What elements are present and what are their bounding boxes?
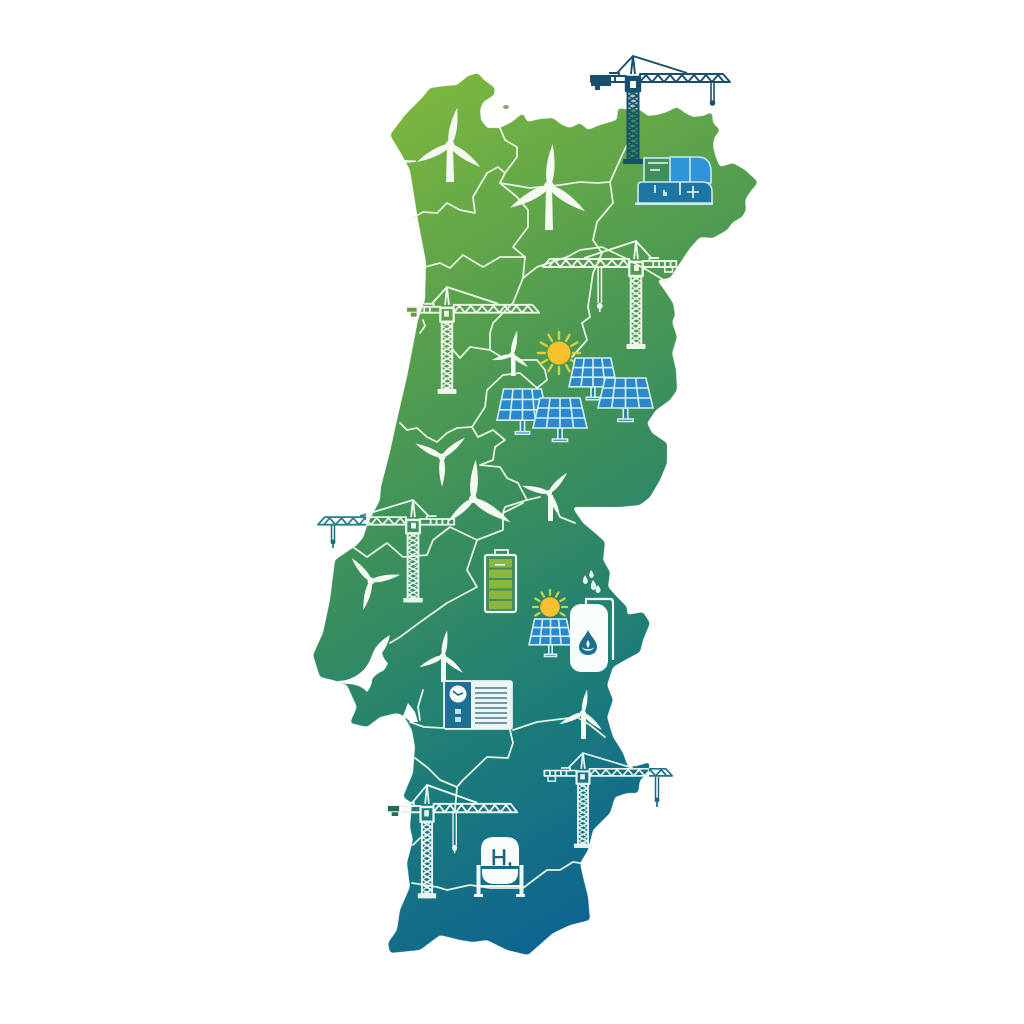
building: left upper block (644, 158, 672, 183)
solar panel: B (533, 398, 587, 442)
hydrogen tank: bowl (482, 869, 518, 884)
sun: south (533, 590, 567, 617)
Tagus estuary (337, 635, 390, 692)
crane: south-east white with teal jib end (544, 753, 672, 847)
crane: south-west white (388, 785, 517, 897)
solar panel: C (569, 358, 617, 400)
turbine: beside sun (491, 330, 529, 376)
data panel: clock (450, 686, 466, 702)
wind turbines (349, 107, 603, 739)
data panel icon (444, 681, 512, 729)
building: base line (635, 202, 713, 205)
hydrogen tank: legs (474, 865, 525, 897)
map of Portugal (313, 73, 758, 955)
solar panel: D (598, 378, 653, 422)
tank: body (570, 604, 608, 672)
turbine: west coast (349, 556, 401, 611)
Sado estuary (403, 703, 418, 722)
small island (503, 105, 509, 109)
regional borders (353, 128, 667, 890)
turbine: north-centre (508, 144, 588, 230)
hydrogen tank: label: H, (491, 845, 513, 870)
data panel: frame (444, 681, 512, 729)
building: marks (648, 163, 699, 198)
battery: cells (489, 559, 512, 609)
battery: cap (495, 550, 508, 555)
tank: pipe (586, 599, 613, 660)
tank: water drop (579, 630, 597, 655)
storage building icon (635, 157, 713, 205)
turbine: centre-east (521, 471, 569, 521)
turbine: centre (446, 460, 513, 526)
crane: north-coast white (407, 287, 539, 393)
crane: north-east navy (591, 56, 730, 163)
map silhouette (313, 73, 758, 955)
building: dome (670, 157, 711, 183)
crane jib over white background (649, 768, 674, 777)
water tank icon (570, 570, 613, 672)
battery icon (485, 550, 516, 612)
solar panel: south (529, 619, 572, 656)
crane hook (654, 777, 660, 807)
battery: body (485, 555, 516, 612)
data panel: blue side (445, 682, 471, 728)
hydrogen tank: body (481, 837, 519, 866)
building: lower block (638, 182, 712, 203)
data panel: text lines (475, 688, 507, 723)
turbine: centre-west (414, 435, 467, 487)
crane: north-central white (543, 241, 676, 348)
crane: central-coast white with teal jib end (318, 500, 454, 602)
data panel: indicators (455, 709, 461, 714)
turbine: north-west (400, 107, 482, 182)
turbine: south-east (558, 689, 603, 739)
turbine: above data panel (418, 630, 465, 682)
solar panel array (497, 358, 653, 442)
hydrogen tank icon (474, 837, 525, 897)
crane hook (330, 525, 336, 548)
crane jib over white background (316, 514, 366, 526)
solar panel: A (497, 389, 548, 434)
sun: north (538, 332, 580, 374)
tank: droplets (583, 570, 601, 593)
